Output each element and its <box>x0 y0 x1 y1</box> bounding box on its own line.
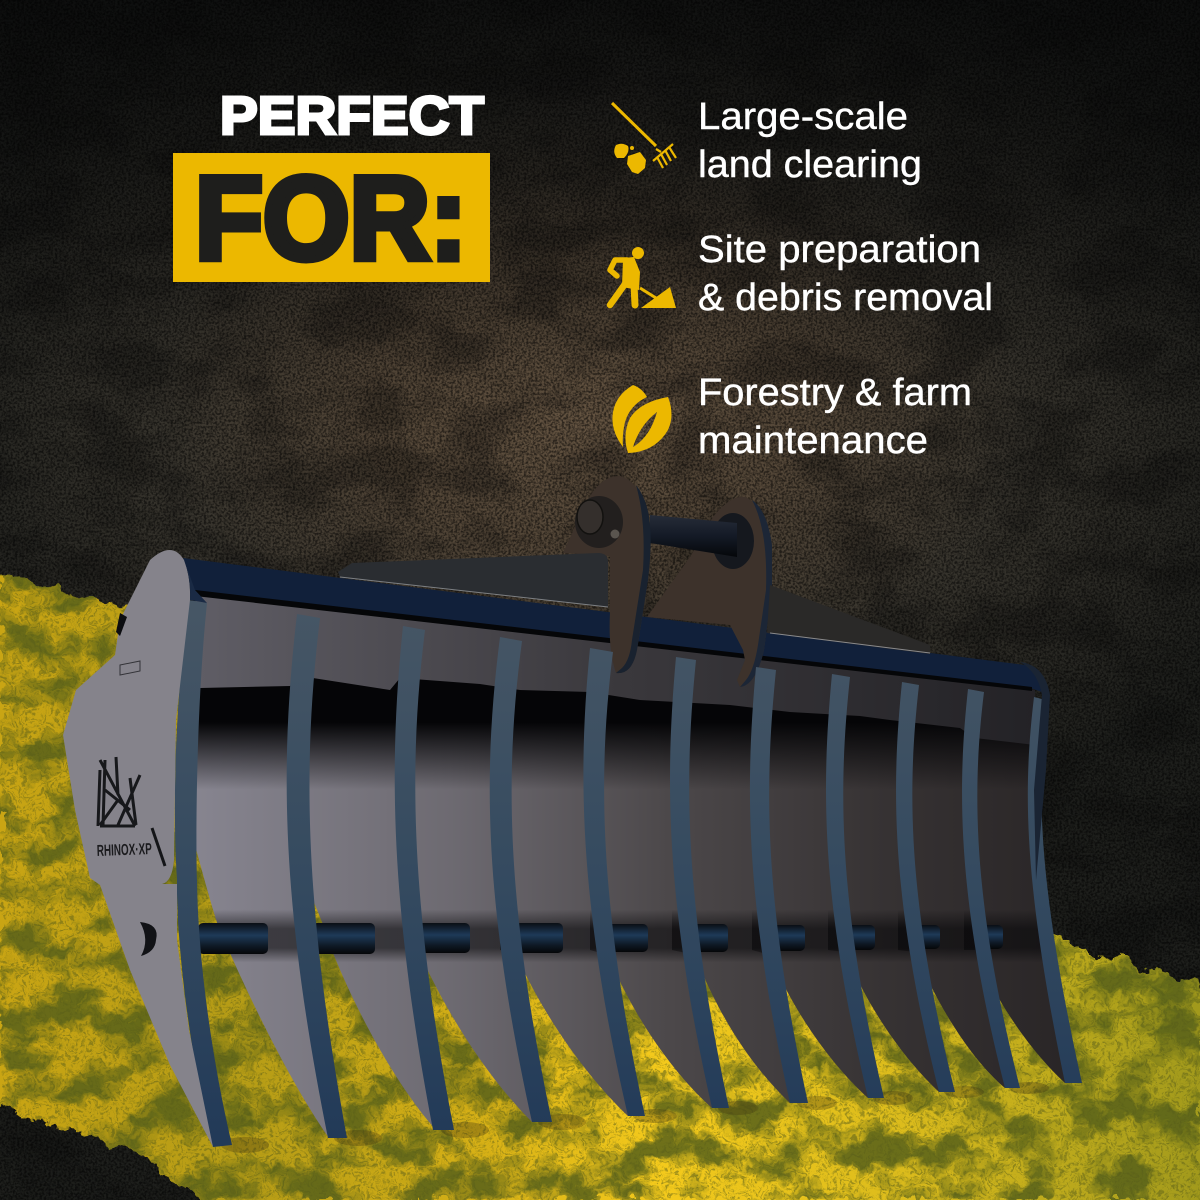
logo mark <box>98 757 140 826</box>
side plate body <box>63 550 213 1147</box>
text: Forestry & farm <box>698 372 972 414</box>
rear lug edge <box>740 500 772 687</box>
back wall under beam <box>195 592 1035 745</box>
icon: leaves <box>612 385 672 453</box>
top beam <box>183 558 1042 692</box>
side plate front edge shade <box>184 560 207 603</box>
text <box>698 229 993 319</box>
slot rectangle <box>120 661 140 675</box>
yellow paint swash <box>0 560 1200 1200</box>
text: Large-scale <box>698 96 908 138</box>
cross pipe segments <box>198 923 1003 954</box>
text: & debris removal <box>698 277 993 319</box>
front lug plate <box>563 476 650 673</box>
icon: rake <box>612 103 676 174</box>
rear collar <box>712 513 754 569</box>
brand text: RHINOX·XP <box>97 841 152 860</box>
brand underline <box>152 828 165 866</box>
text: land clearing <box>698 144 922 186</box>
mounting plate left <box>338 553 608 607</box>
right end plate <box>1020 662 1050 880</box>
tines <box>175 600 1082 1147</box>
text: Site preparation <box>698 229 981 271</box>
text <box>698 96 922 186</box>
heading box: FOR: FOR: <box>195 153 467 285</box>
pin cap <box>575 496 623 548</box>
tine tip shadows <box>221 1082 1049 1153</box>
mounting plate right <box>767 585 930 654</box>
rake attachment product <box>63 476 1082 1147</box>
item: forestry <box>612 372 972 462</box>
side bolt crescent <box>140 922 157 956</box>
front lug edge <box>616 485 651 673</box>
icon: worker with shovel <box>610 247 676 308</box>
rear lug plate <box>647 497 772 687</box>
hinge pin <box>650 515 737 557</box>
heading: PERFECT: PERFECT <box>220 86 484 146</box>
text <box>698 372 972 462</box>
curved blades <box>185 640 1073 1138</box>
item: site preparation <box>610 229 993 319</box>
text: maintenance <box>698 420 928 462</box>
slot top <box>116 613 127 636</box>
item: land clearing <box>612 96 922 186</box>
